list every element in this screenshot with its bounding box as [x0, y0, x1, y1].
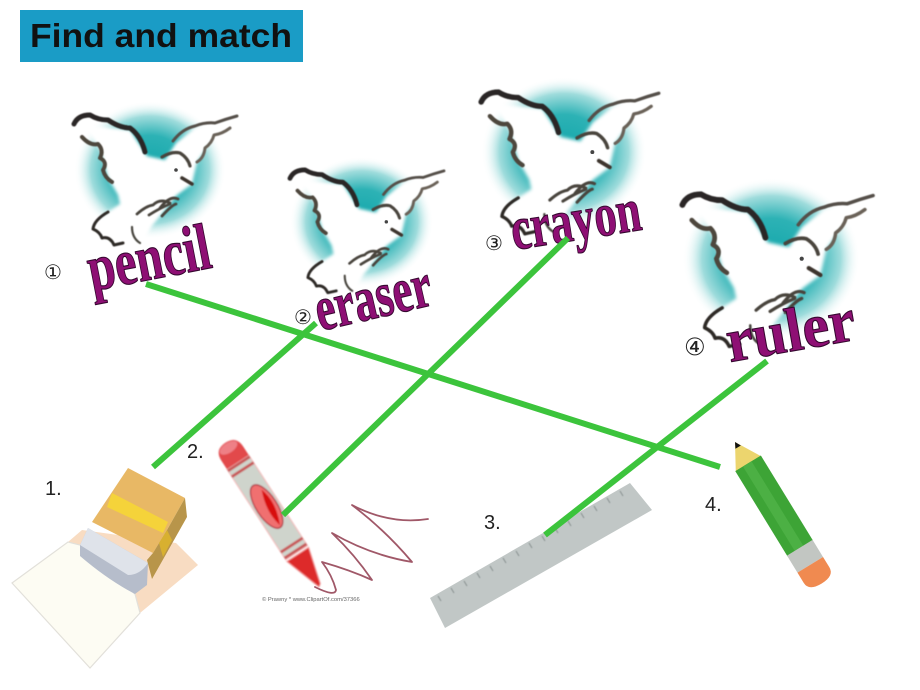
number 2: 2. [187, 441, 204, 463]
number 1: 1. [45, 478, 62, 500]
circled number 4: ④ [684, 333, 706, 361]
connecting line: eraser to 1 [153, 323, 316, 467]
number 4: 4. [705, 494, 722, 516]
word: ruler: ruler [721, 286, 860, 376]
circled number 2: ② [294, 305, 312, 329]
word: crayon: crayon [506, 176, 646, 264]
icon: eraser on paper [12, 468, 198, 668]
connecting line: pencil to 4 [146, 284, 720, 467]
connecting line: ruler to 3 [545, 361, 767, 535]
icon: ruler [430, 483, 652, 628]
icon: dove 2 [290, 157, 444, 294]
icon: dove 4 [682, 178, 873, 348]
credit: © Prawny * www.ClipartOf.com/37366 [262, 596, 360, 603]
scribble [315, 505, 428, 593]
circled number 1: ① [44, 260, 62, 284]
circled number 3: ③ [485, 231, 503, 255]
number 3: 3. [484, 512, 501, 534]
icon: pencil [722, 434, 835, 591]
icon: dove 3 [481, 77, 659, 235]
connecting line: crayon to 2 [283, 238, 568, 515]
title: Find and match [30, 17, 292, 54]
icon: crayon [214, 436, 428, 603]
title [20, 10, 303, 62]
word: pencil: pencil [81, 210, 217, 306]
icon: dove 1 [74, 101, 237, 246]
word: eraser: eraser [307, 249, 438, 345]
